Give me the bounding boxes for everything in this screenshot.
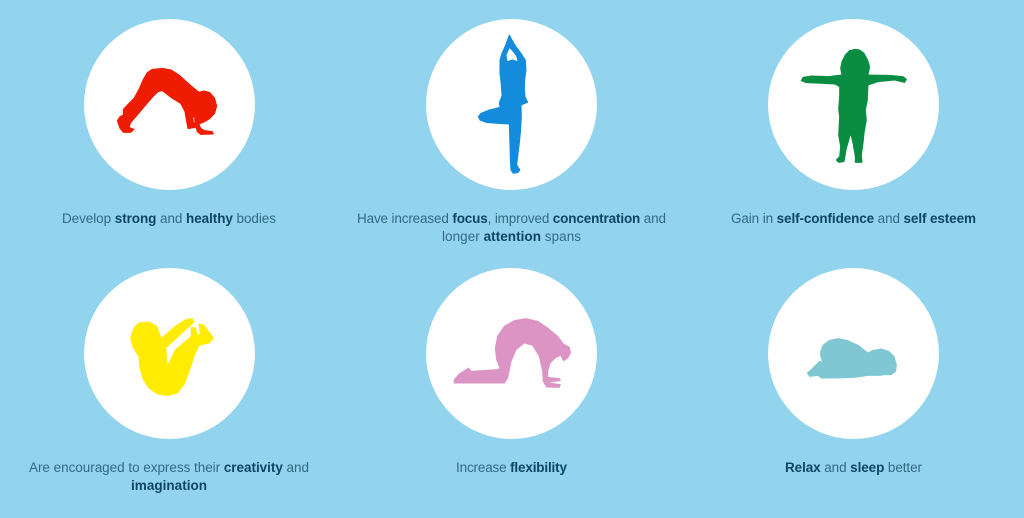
white circle: [84, 19, 255, 190]
icon: red child in bridge pose: [117, 68, 217, 134]
caption: Gain in self-confidence and self esteem: [731, 211, 976, 226]
panel: creativity and imagination: [29, 268, 309, 493]
icon: yellow child in boat pose: [131, 319, 213, 396]
caption: Have increased focus, improved concentration and: [357, 211, 666, 226]
caption: Relax and sleep better: [785, 460, 922, 475]
caption: Develop strong and healthy bodies: [62, 211, 276, 226]
panel: strong and healthy bodies: [62, 19, 276, 226]
panel: flexibility: [426, 268, 597, 475]
white circle: [426, 19, 597, 190]
caption: longer attention spans: [442, 229, 581, 244]
white circle: [84, 268, 255, 439]
white circle: [426, 268, 597, 439]
caption: imagination: [131, 478, 207, 493]
icon: pink child in cat pose: [454, 319, 570, 387]
white circle: [768, 268, 939, 439]
panel: relax and sleep: [768, 268, 939, 475]
caption: [357, 211, 666, 244]
caption: Are encouraged to express their creativity and: [29, 460, 309, 475]
caption: [29, 460, 309, 493]
icon: blue child in tree pose: [478, 35, 528, 173]
panel: self-confidence: [731, 19, 976, 226]
caption: Increase flexibility: [456, 460, 567, 475]
icon: green child with arms outstretched: [801, 49, 906, 162]
icon: teal child resting in child's pose: [807, 339, 896, 378]
panel: focus and concentration: [357, 19, 666, 244]
white circle: [768, 19, 939, 190]
